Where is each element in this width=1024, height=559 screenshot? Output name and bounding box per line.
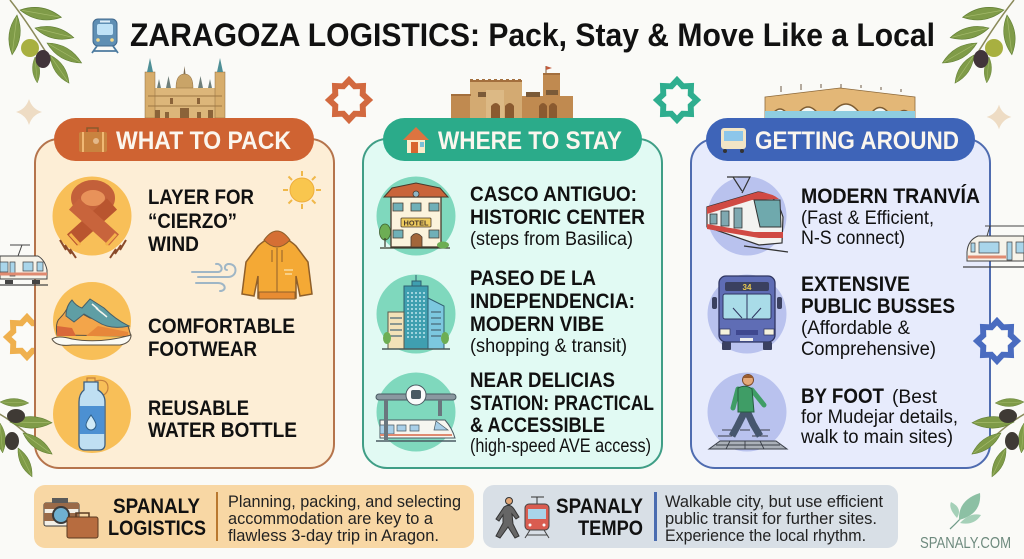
- text: water bottle: [148, 397, 297, 442]
- decoration: orange star: [329, 80, 369, 120]
- icon: suitcase: [79, 128, 107, 152]
- label: spanaly logistics: [108, 495, 206, 540]
- icon: olive branch top right: [940, 0, 1017, 86]
- label: spanaly logistics: LOGISTICS: [108, 517, 206, 540]
- callout: spanaly tempo: [483, 485, 898, 548]
- title: ZARAGOZA LOGISTICS: Pack, Stay & Move Like a Local: [130, 17, 935, 53]
- text: by foot: [800, 385, 958, 448]
- icon: tram left: [0, 245, 48, 285]
- text: busses: (Affordable &: [801, 318, 910, 339]
- text: tempo note: Walkable city, but use efficient: [665, 492, 883, 511]
- icon: tram right: [963, 226, 1024, 267]
- icon: walker and tram: [496, 497, 549, 538]
- text: delicias: [470, 369, 654, 457]
- text: delicias: & ACCESSIBLE: [470, 414, 605, 437]
- decoration: sparkle right: [987, 105, 1011, 129]
- icon: tower: [376, 274, 456, 354]
- icon: hotel: HOTEL: [404, 220, 429, 228]
- landmark: basilica: [145, 58, 225, 118]
- text: footwear: FOOTWEAR: [148, 338, 257, 361]
- text: tempo note: public transit for further sites.: [665, 509, 877, 528]
- text: tranvia: [801, 185, 980, 249]
- icon: walker: [708, 372, 787, 452]
- text: by foot: for Mudejar details,: [801, 407, 958, 428]
- text: delicias: (high-speed AVE access): [470, 436, 651, 457]
- label: spanaly tempo: [556, 495, 643, 540]
- callout: spanaly logistics: [34, 485, 474, 548]
- logo: spanaly leaf: [950, 493, 981, 529]
- icon: tram: [707, 176, 788, 256]
- label: spanaly logistics: SPANALY: [113, 495, 200, 518]
- text: paseo: [470, 267, 635, 357]
- icon: olive branch top left: [7, 0, 84, 86]
- text: logistics note: flawless 3-day trip in Aragon.: [228, 526, 439, 545]
- landmark: stone bridge: [765, 84, 915, 118]
- text: logistics note: Planning, packing, and selecting: [228, 492, 461, 511]
- icon: house: [403, 127, 429, 153]
- icon: water bottle: [53, 375, 131, 453]
- pill header: what to pack: WHAT TO PACK: [116, 127, 291, 155]
- decoration: blue star right: [977, 321, 1017, 361]
- text: delicias: STATION: PRACTICAL: [470, 392, 654, 415]
- panel: getting around: [691, 118, 990, 468]
- pill header: where to stay: WHERE TO STAY: [438, 127, 622, 155]
- icon: bus header: [721, 128, 746, 153]
- icon: jacket: [242, 231, 312, 299]
- pill header: what to pack: [54, 118, 314, 161]
- text: by foot: BY FOOT: [801, 385, 884, 408]
- pill header: where to stay: [383, 118, 642, 161]
- pill header: getting around: [706, 118, 975, 161]
- decoration: yellow star left: [7, 317, 47, 357]
- text: paseo: MODERN VIBE: [470, 313, 604, 336]
- text: busses: [801, 273, 955, 360]
- pill header: getting around: GETTING AROUND: [755, 127, 959, 155]
- label: spanaly tempo: TEMPO: [578, 517, 643, 540]
- icon: hotel: [376, 176, 456, 256]
- text: tempo note: [665, 492, 883, 545]
- decoration: green star: [657, 80, 697, 120]
- text: delicias: NEAR DELICIAS: [470, 369, 615, 392]
- text: busses: PUBLIC BUSSES: [801, 295, 955, 318]
- icon: bus: 34: [742, 283, 752, 292]
- panel: what to pack: [35, 118, 334, 468]
- text: paseo: (shopping & transit): [470, 336, 627, 357]
- text: water bottle: REUSABLE: [148, 397, 249, 420]
- text: layer: WIND: [148, 233, 199, 256]
- panel: where to stay: [363, 118, 662, 468]
- text: tempo note: Experience the local rhythm.: [665, 526, 866, 545]
- text: logistics note: accommodation are key to a: [228, 509, 434, 528]
- icon: scarf: [52, 176, 132, 258]
- icon: olive branch bottom left: [0, 398, 55, 479]
- text: busses: EXTENSIVE: [801, 273, 910, 296]
- text: footwear: [148, 315, 295, 361]
- text: layer: [148, 186, 254, 256]
- text: paseo: INDEPENDENCIA:: [470, 290, 635, 313]
- text: tranvia: MODERN TRANVÍA: [801, 185, 980, 208]
- label: spanaly tempo: SPANALY: [556, 495, 643, 518]
- icon: camera and suitcase: [44, 498, 98, 538]
- text: busses: Comprehensive): [801, 339, 936, 360]
- text: paseo: PASEO DE LA: [470, 267, 596, 290]
- decoration: sparkle left: [16, 99, 42, 125]
- text: by foot: walk to main sites): [800, 427, 953, 448]
- text: casco antiguo: CASCO ANTIGUO:: [470, 183, 637, 206]
- text: footwear: COMFORTABLE: [148, 315, 295, 338]
- text: layer: LAYER FOR: [148, 186, 254, 209]
- text: tranvia: N-S connect): [801, 228, 905, 249]
- text: casco antiguo: HISTORIC CENTER: [470, 206, 645, 229]
- icon: olive branch bottom right: [969, 398, 1024, 479]
- text: logistics note: [228, 492, 461, 545]
- icon: bus: [708, 274, 786, 354]
- icon: train title: [92, 19, 118, 53]
- text: water bottle: WATER BOTTLE: [148, 419, 297, 442]
- text: casco antiguo: (steps from Basilica): [470, 229, 633, 250]
- text: tranvia: (Fast & Efficient,: [801, 208, 934, 229]
- icon: sun: [283, 171, 321, 209]
- icon: shoe: [52, 282, 131, 360]
- text: layer: “CIERZO”: [148, 210, 237, 233]
- icon: wind: [192, 264, 236, 291]
- text: casco antiguo: [470, 183, 645, 250]
- icon: station: [376, 372, 456, 452]
- landmark: aljaferia: [451, 66, 573, 118]
- text: by foot: (Best: [892, 387, 938, 408]
